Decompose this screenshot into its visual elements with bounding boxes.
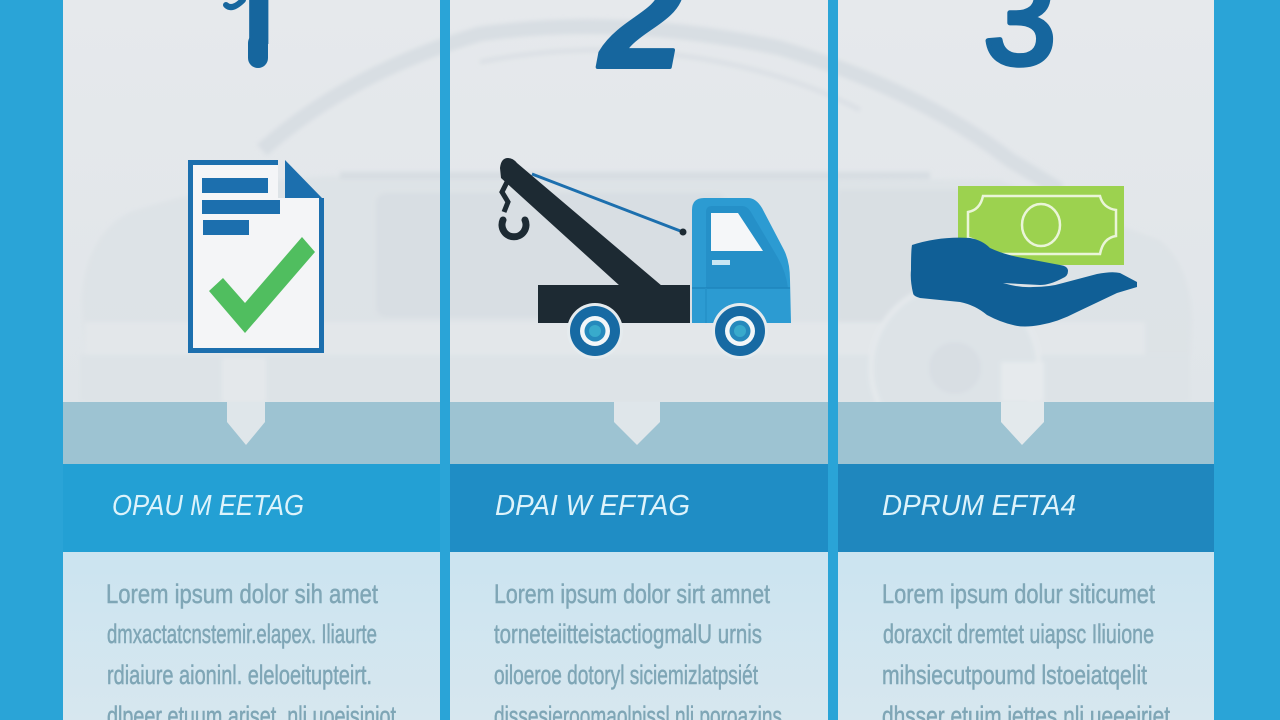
ghost car illustration: [260, 20, 1061, 392]
heading: step 2: [450, 464, 828, 552]
panel: step 2 text: [450, 464, 828, 720]
number 1: [223, 0, 268, 68]
heading: step 1: [63, 464, 440, 552]
panel: step 1 text: [63, 464, 440, 720]
text block: step 1: Lorem ipsum dolor sih amet: [106, 579, 378, 609]
heading: step 3: [838, 464, 1214, 552]
icon: document with check mark: [188, 160, 322, 353]
heading: step 3: DPRUM EFTA4: [882, 490, 1076, 522]
heading: step 2: DPAI W EFTAG: [495, 490, 690, 522]
text block: step 1: [63, 552, 440, 720]
text block: step 2: Lorem ipsum dolor sirt amnet: [494, 579, 770, 609]
text block: step 3: mihsiecutpoumd lstoeiatqelit: [882, 660, 1147, 690]
text block: step 3: Lorem ipsum dolur siticumet: [882, 579, 1155, 609]
text block: step 3: [838, 552, 1214, 720]
pointer: step 3: [1001, 402, 1044, 445]
icon: hand holding banknote: [911, 186, 1137, 326]
heading: step 1: OPAU M EETAG: [112, 490, 304, 522]
text block: step 2: oiloeroe dotoryl siciemizlatpsiét: [494, 660, 758, 690]
pointer: step 2: [614, 402, 660, 445]
panel: step 3 text: [838, 464, 1214, 720]
text block: step 2: torneteiitteistactiogmalU urnis: [494, 619, 762, 649]
panel: step 3 background: [838, 0, 1214, 464]
text block: step 1: dmxactatcnstemir.elapex. Iliaurte: [107, 619, 377, 649]
pointer: step 1: [227, 402, 265, 445]
text block: step 2: [450, 552, 828, 720]
text block: step 3: doraxcit dremtet uiapsc Iliuione: [883, 619, 1154, 649]
panel: step 1 background: [63, 0, 440, 464]
panel: step 2 background: [450, 0, 828, 464]
text block: step 1: rdiaiure aioninl. eleloeitupteirt.: [107, 660, 372, 690]
icon: tow truck: [500, 158, 791, 359]
